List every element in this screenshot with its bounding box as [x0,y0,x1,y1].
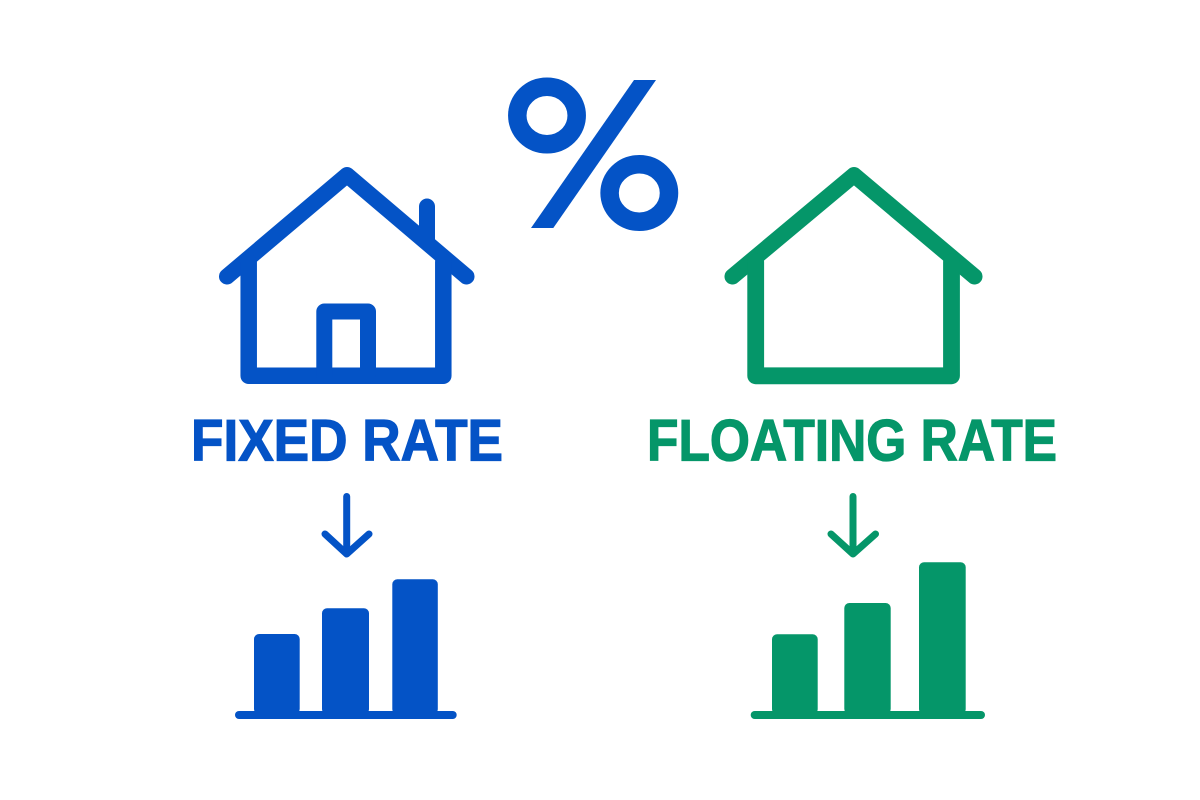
bar chart: fixed rate [235,579,457,719]
icon: floating rate house [732,175,974,376]
arrow: floating rate [831,496,876,554]
icon: percent sign [517,80,669,228]
bar chart: floating rate [751,562,985,719]
icon: fixed rate house [227,175,466,376]
heading: fixed rate: FIXED RATE [191,408,503,474]
arrow: fixed rate [325,496,369,554]
heading: floating rate: FLOATING RATE [647,408,1057,474]
